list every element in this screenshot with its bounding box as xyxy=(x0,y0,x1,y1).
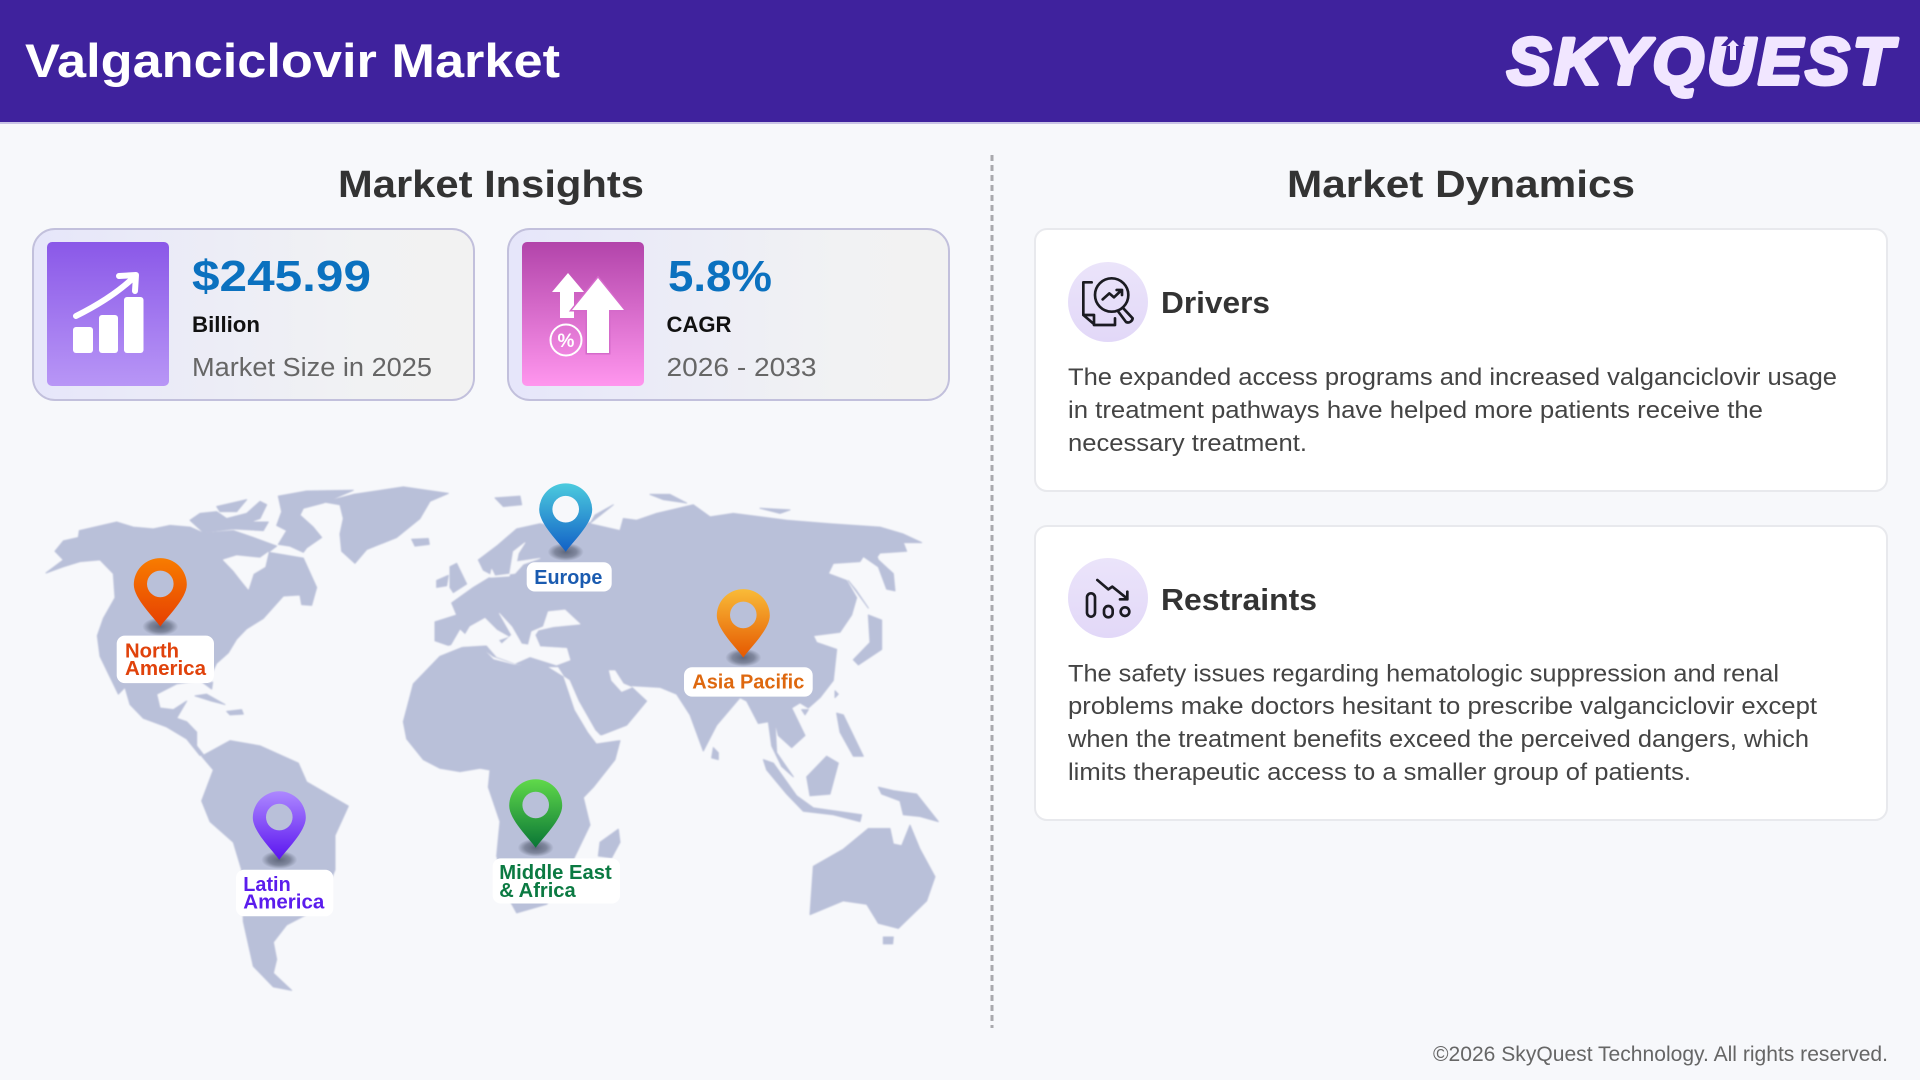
unit: CAGR xyxy=(666,312,732,337)
pin: Asia Pacific xyxy=(717,589,770,667)
Greenland xyxy=(324,487,448,563)
title: Valganciclovir Market xyxy=(25,34,560,87)
Kamchatka xyxy=(863,551,895,591)
Mediterranean and Black Sea xyxy=(440,610,580,665)
label: Europe xyxy=(527,562,612,592)
stat card: market size xyxy=(33,229,474,400)
label: Middle East and Africa: & Africa xyxy=(499,879,576,902)
footer copyright: ©2026 SkyQuest Technology. All rights reserved. xyxy=(1433,1043,1888,1066)
label: Latin America: America xyxy=(243,891,325,914)
icon: document with magnifier xyxy=(1068,262,1148,342)
stat card: CAGR xyxy=(508,229,949,400)
label: Europe: Europe xyxy=(534,566,602,589)
Arctic and Pacific islands xyxy=(495,494,938,822)
Eurasia xyxy=(435,505,922,777)
heading: Market Dynamics: Market Dynamics xyxy=(1287,164,1635,206)
pin: Europe xyxy=(539,483,592,561)
Persian Gulf xyxy=(609,671,632,691)
text: drivers description: The expanded access programs and increased valganciclovir usage xyxy=(1068,364,1837,391)
icon: growth arrows with percent: % xyxy=(558,331,575,352)
caption: 2026 - 2033 xyxy=(666,354,816,382)
header bar xyxy=(0,0,1920,124)
heading: Drivers: Drivers xyxy=(1161,285,1270,320)
pin: Middle East and Africa xyxy=(509,779,562,857)
value: 5.8% xyxy=(668,252,772,301)
label: Middle East and Africa: Middle East xyxy=(499,861,612,884)
icon: growth arrows with percent xyxy=(522,242,644,386)
text: drivers description: in treatment pathways have helped more patients receive the xyxy=(1068,397,1763,424)
Arctic islands xyxy=(190,490,353,552)
text: restraints description: The safety issues regarding hematologic suppression and renal xyxy=(1068,660,1779,688)
label: Latin America xyxy=(236,870,333,916)
text: restraints description: when the treatment benefits exceed the perceived dangers, which xyxy=(1067,726,1809,753)
Iceland and British Isles xyxy=(412,539,467,593)
value: $245.99 xyxy=(192,252,371,301)
label: North America xyxy=(117,636,214,683)
Australia xyxy=(810,825,935,944)
caption: Market Size in 2025 xyxy=(192,354,432,382)
text: restraints description xyxy=(1067,660,1817,786)
panel: Drivers xyxy=(1035,229,1887,491)
heading: Restraints: Restraints xyxy=(1161,582,1317,617)
label: Latin America: Latin xyxy=(243,873,291,896)
Africa xyxy=(403,644,620,913)
Baltic Sea xyxy=(490,543,540,577)
South America xyxy=(202,741,348,990)
text: drivers description: necessary treatment. xyxy=(1068,430,1307,457)
label: Middle East and Africa xyxy=(493,858,620,904)
icon: declining trend with bars xyxy=(1068,558,1148,638)
North America xyxy=(46,522,317,755)
text: restraints description: limits therapeutic access to a smaller group of patients. xyxy=(1068,759,1691,786)
Madagascar xyxy=(598,829,620,858)
Hudson Bay xyxy=(223,552,268,589)
unit: Billion xyxy=(192,312,260,337)
world map xyxy=(46,487,938,990)
pin: Latin America xyxy=(253,791,306,869)
text: drivers description xyxy=(1068,364,1837,457)
heading: Market Insights: Market Insights xyxy=(338,164,644,206)
label: North America: America xyxy=(125,657,207,680)
label: North America: North xyxy=(125,639,179,662)
Red Sea xyxy=(564,677,620,743)
pin: North America xyxy=(134,558,187,636)
text: restraints description: problems make doctors hesitant to prescribe valganciclovir except xyxy=(1068,693,1817,720)
panel: Restraints xyxy=(1035,526,1887,820)
logo: SkyQuest: SKYQUEST xyxy=(1507,24,1898,98)
icon: rising bar chart xyxy=(47,242,169,386)
Caribbean xyxy=(195,694,243,715)
label: Asia Pacific: Asia Pacific xyxy=(692,671,804,694)
